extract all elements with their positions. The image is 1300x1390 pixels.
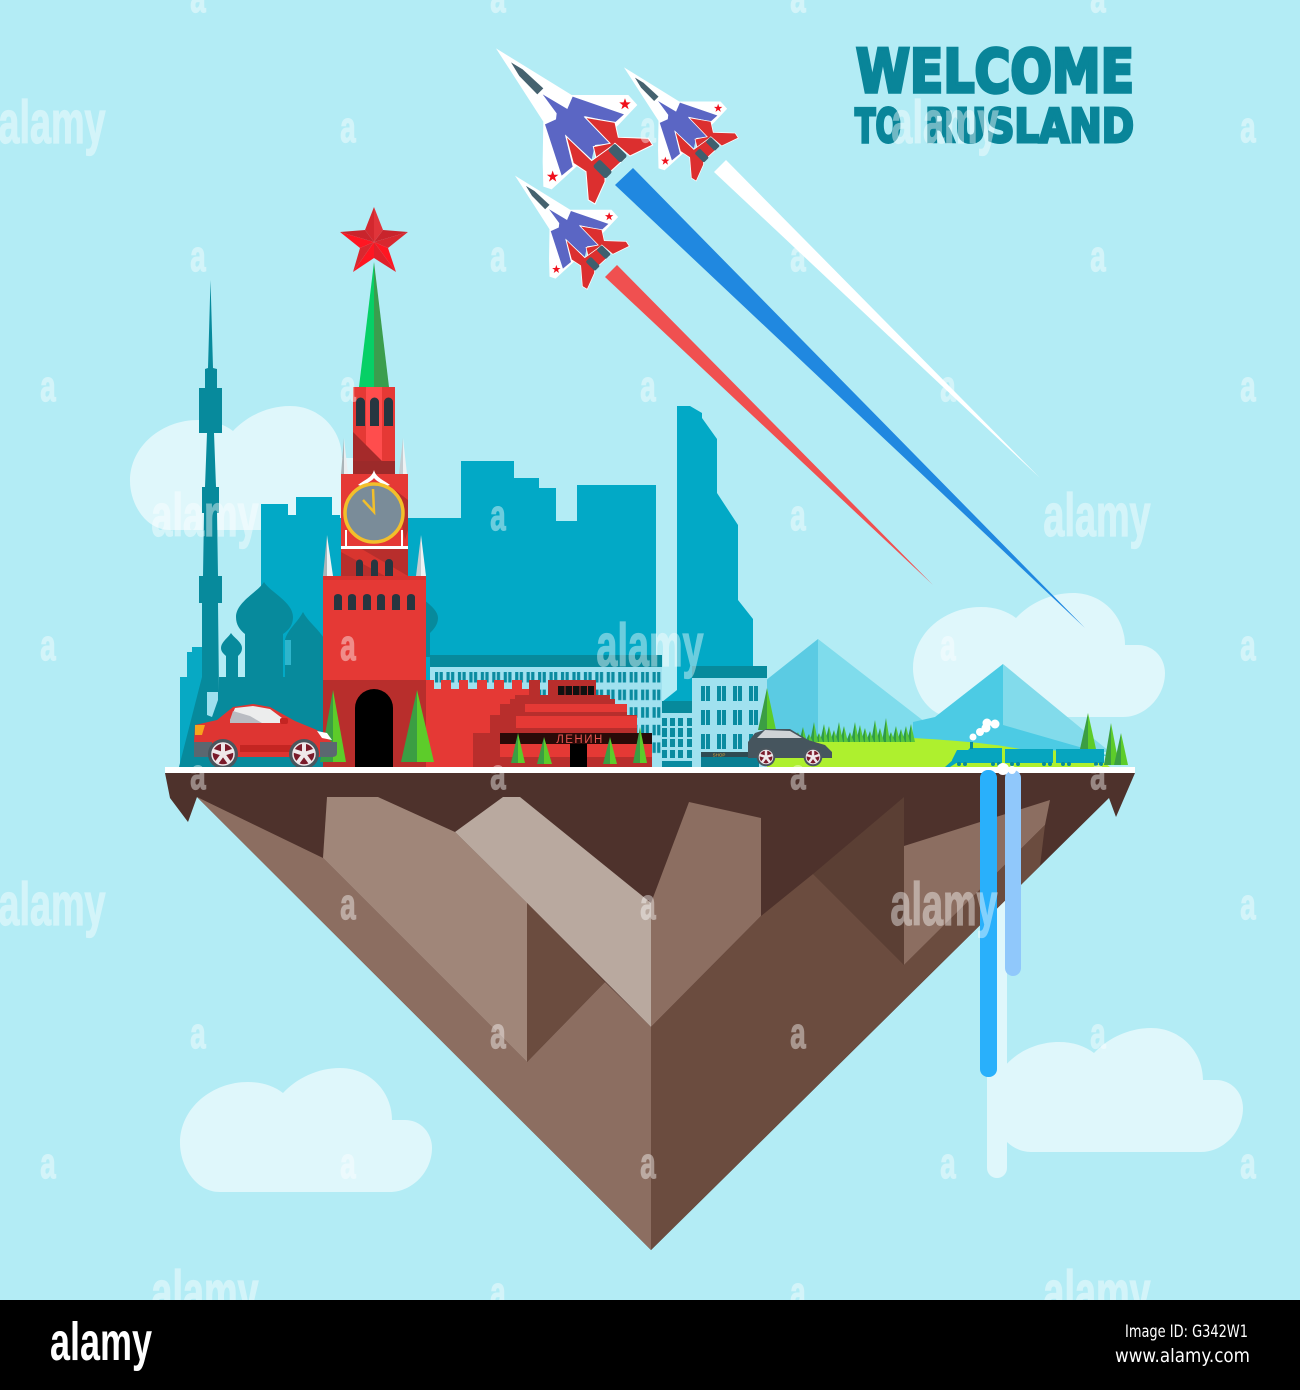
- long government building: [430, 655, 662, 767]
- cloud: right of skyline: [913, 593, 1165, 717]
- watermarks: a: [340, 621, 356, 670]
- footer url: www.alamy.com: [1115, 1345, 1250, 1367]
- watermarks: a: [640, 1139, 656, 1188]
- watermarks: a: [1090, 232, 1106, 281]
- watermarks: a: [790, 1009, 806, 1058]
- watermarks: a: [1240, 621, 1256, 670]
- fir trees by tower and mausoleum: [320, 690, 647, 764]
- watermarks: alamy: [596, 612, 704, 679]
- small left buildings: [180, 647, 210, 763]
- Spasskaya tower: [323, 207, 426, 767]
- background city block: [261, 461, 656, 700]
- watermarks: a: [340, 880, 356, 929]
- watermarks: a: [190, 750, 206, 799]
- small teal building: [662, 701, 692, 767]
- watermarks: a: [790, 1268, 806, 1317]
- Kremlin wall: [426, 680, 530, 767]
- footer logo: alamy: [50, 1311, 152, 1372]
- lower spikes: [323, 535, 426, 576]
- watermarks: a: [940, 362, 956, 411]
- watermarks: a: [940, 621, 956, 670]
- skyscraper silhouette: [662, 406, 753, 710]
- green hill: [765, 738, 1110, 767]
- watermarks: alamy: [0, 871, 106, 938]
- watermarks: a: [640, 362, 656, 411]
- watermarks: a: [490, 491, 506, 540]
- clock: [345, 484, 403, 542]
- watermarks: a: [1240, 1139, 1256, 1188]
- watermarks: a: [190, 232, 206, 281]
- right office building: [692, 666, 767, 767]
- tree behind dark car: [758, 688, 776, 730]
- spire: [359, 262, 389, 387]
- title: [855, 37, 1134, 153]
- jet: lead: [496, 48, 653, 204]
- waterfall: [980, 763, 1021, 1077]
- dark car: [748, 729, 832, 766]
- watermarks: a: [40, 1139, 56, 1188]
- watermarks: alamy: [890, 871, 998, 938]
- watermarks: a: [340, 362, 356, 411]
- watermarks: alamy: [151, 482, 259, 549]
- watermarks: a: [1240, 362, 1256, 411]
- watermarks: alamy: [1043, 482, 1151, 549]
- watermarks: a: [490, 750, 506, 799]
- watermarks: alamy: [1043, 1259, 1151, 1326]
- title: RUSLAND: [925, 99, 1134, 153]
- watermarks: a: [790, 750, 806, 799]
- tower base gaps: [207, 640, 291, 717]
- watermarks: a: [490, 1268, 506, 1317]
- watermarks: a: [790, 491, 806, 540]
- watermarks: a: [940, 1139, 956, 1188]
- right fir trees: [1080, 713, 1128, 765]
- Lenin mausoleum: [473, 680, 652, 767]
- red car: [194, 704, 337, 769]
- Lenin mausoleum: ЛЕНИН: [556, 734, 604, 746]
- shop: [701, 752, 759, 767]
- cloud: bottom left: [180, 1068, 432, 1192]
- cloud: behind tower: [130, 406, 382, 530]
- ground strip: [165, 767, 1135, 774]
- jet: right: [624, 67, 738, 181]
- red star: [340, 207, 408, 272]
- cloud: bottom right with water stem: [987, 767, 1243, 1178]
- upper spikes: [341, 438, 407, 474]
- clock section: [341, 470, 408, 576]
- watermarks: alamy: [0, 89, 106, 156]
- pine forest row: [794, 718, 915, 742]
- watermarks: alamy: [891, 89, 999, 156]
- watermarks: a: [40, 362, 56, 411]
- train with steam: [945, 718, 1104, 767]
- jet: lower: [515, 176, 629, 289]
- title: WELCOME: [856, 37, 1134, 107]
- Ostankino tower and base silhouette: [179, 280, 438, 767]
- mountains: [760, 639, 1110, 767]
- contrails: [605, 160, 1085, 628]
- tower body: [323, 576, 426, 767]
- belfry: [353, 387, 395, 474]
- footer image id: Image ID: G342W1: [1125, 1322, 1248, 1342]
- floating island rock: [165, 767, 1135, 1250]
- watermarks: alamy: [151, 1259, 259, 1326]
- title: TO: [855, 99, 901, 153]
- watermarks: a: [790, 232, 806, 281]
- watermarks: a: [1240, 880, 1256, 929]
- watermarks: a: [1240, 103, 1256, 152]
- watermarks: a: [1090, 1009, 1106, 1058]
- watermarks: a: [490, 232, 506, 281]
- watermarks: a: [640, 103, 656, 152]
- watermarks: a: [340, 103, 356, 152]
- watermarks: a: [190, 1009, 206, 1058]
- shop: SHOP: [713, 752, 725, 758]
- watermarks: a: [1090, 750, 1106, 799]
- watermarks: a: [340, 1139, 356, 1188]
- black footer bar: [0, 1300, 1300, 1390]
- watermarks: a: [40, 621, 56, 670]
- watermarks: a: [490, 1009, 506, 1058]
- watermarks: a: [640, 880, 656, 929]
